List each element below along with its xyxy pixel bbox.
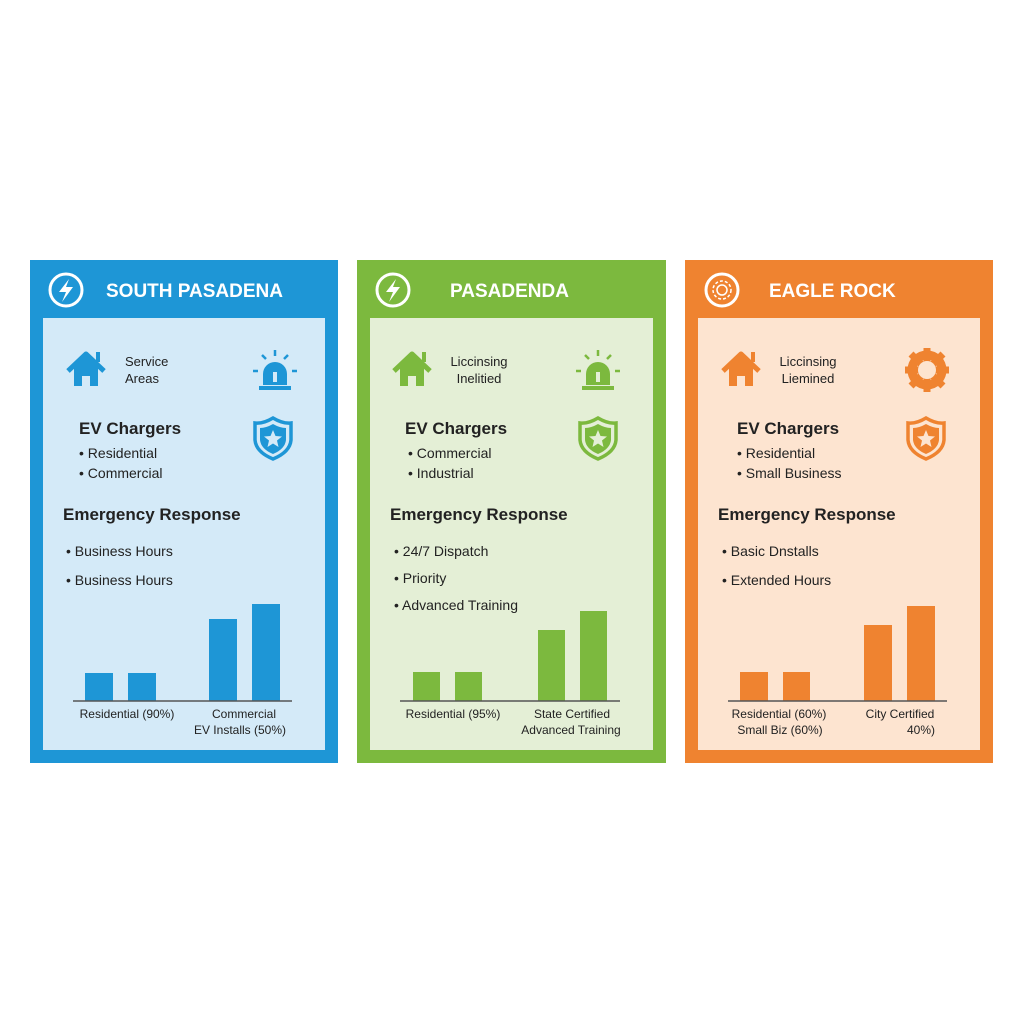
bar chart: 40%) bbox=[907, 723, 935, 737]
emergency response block: • Business Hours bbox=[66, 543, 173, 559]
EV chargers block bbox=[405, 419, 507, 481]
EV chargers block: • Commercial bbox=[408, 445, 491, 461]
emergency response block: Emergency Response bbox=[63, 505, 241, 524]
icon: siren bbox=[576, 350, 620, 390]
EV chargers block: EV Chargers bbox=[737, 419, 839, 438]
emergency response block: Emergency Response bbox=[390, 505, 568, 524]
EV chargers block: EV Chargers bbox=[405, 419, 507, 438]
EV chargers block bbox=[79, 419, 181, 481]
service label: Service bbox=[125, 354, 168, 369]
title: PASADENDA bbox=[450, 281, 569, 302]
icon: gear bbox=[905, 348, 949, 392]
licensing label: Liccinsing bbox=[779, 354, 837, 369]
icon: house bbox=[68, 352, 104, 386]
EV chargers block: • Residential bbox=[79, 445, 157, 461]
bar chart: Residential (95%) bbox=[406, 707, 500, 721]
icon: house bbox=[723, 352, 759, 386]
emergency response block: • Advanced Training bbox=[394, 597, 518, 613]
icon: siren bbox=[253, 350, 297, 390]
service label: Areas bbox=[125, 371, 159, 386]
bar chart bbox=[73, 604, 292, 737]
bar chart: State Certified bbox=[534, 707, 610, 721]
panel: Pasadena bbox=[357, 260, 666, 763]
title: EAGLE ROCK bbox=[769, 281, 896, 302]
icon: house bbox=[394, 352, 430, 386]
bar chart: Advanced Training bbox=[521, 723, 621, 737]
emergency response block: Emergency Response bbox=[718, 505, 896, 524]
bar chart bbox=[400, 611, 621, 737]
emergency response block: • Extended Hours bbox=[722, 572, 831, 588]
EV chargers block: • Industrial bbox=[408, 465, 474, 481]
title: SOUTH PASADENA bbox=[106, 281, 283, 302]
emergency response block: • Priority bbox=[394, 570, 446, 586]
licensing label: Inelitied bbox=[457, 371, 501, 386]
icon: shield bbox=[908, 418, 944, 459]
licensing label: Liccinsing bbox=[450, 354, 508, 369]
bar chart: City Certified bbox=[866, 707, 934, 721]
emergency response block bbox=[390, 505, 568, 613]
emergency response block: • Business Hours bbox=[66, 572, 173, 588]
bar chart: Small Biz (60%) bbox=[737, 723, 823, 737]
EV chargers block: • Residential bbox=[737, 445, 815, 461]
emergency response block: • Basic Dnstalls bbox=[722, 543, 819, 559]
panel: Eagle Rock bbox=[685, 260, 993, 763]
EV chargers block bbox=[737, 419, 842, 481]
icon: shield bbox=[255, 418, 291, 459]
emergency response block bbox=[63, 505, 241, 588]
licensing label: Liemined bbox=[782, 371, 834, 386]
bar chart: Residential (60%) bbox=[732, 707, 826, 721]
panel: South Pasadena bbox=[30, 260, 338, 763]
emergency response block: • 24/7 Dispatch bbox=[394, 543, 488, 559]
bar chart: Commercial bbox=[212, 707, 276, 721]
icon: gear circle bbox=[706, 274, 738, 306]
EV chargers block: • Commercial bbox=[79, 465, 162, 481]
bar chart bbox=[728, 606, 947, 737]
icon: lightning circle bbox=[50, 274, 82, 306]
EV chargers block: EV Chargers bbox=[79, 419, 181, 438]
emergency response block bbox=[718, 505, 896, 588]
icon: lightning circle bbox=[377, 274, 409, 306]
bar chart: Residential (90%) bbox=[80, 707, 174, 721]
EV chargers block: • Small Business bbox=[737, 465, 842, 481]
bar chart: EV Installs (50%) bbox=[194, 723, 286, 737]
icon: shield bbox=[580, 418, 616, 459]
